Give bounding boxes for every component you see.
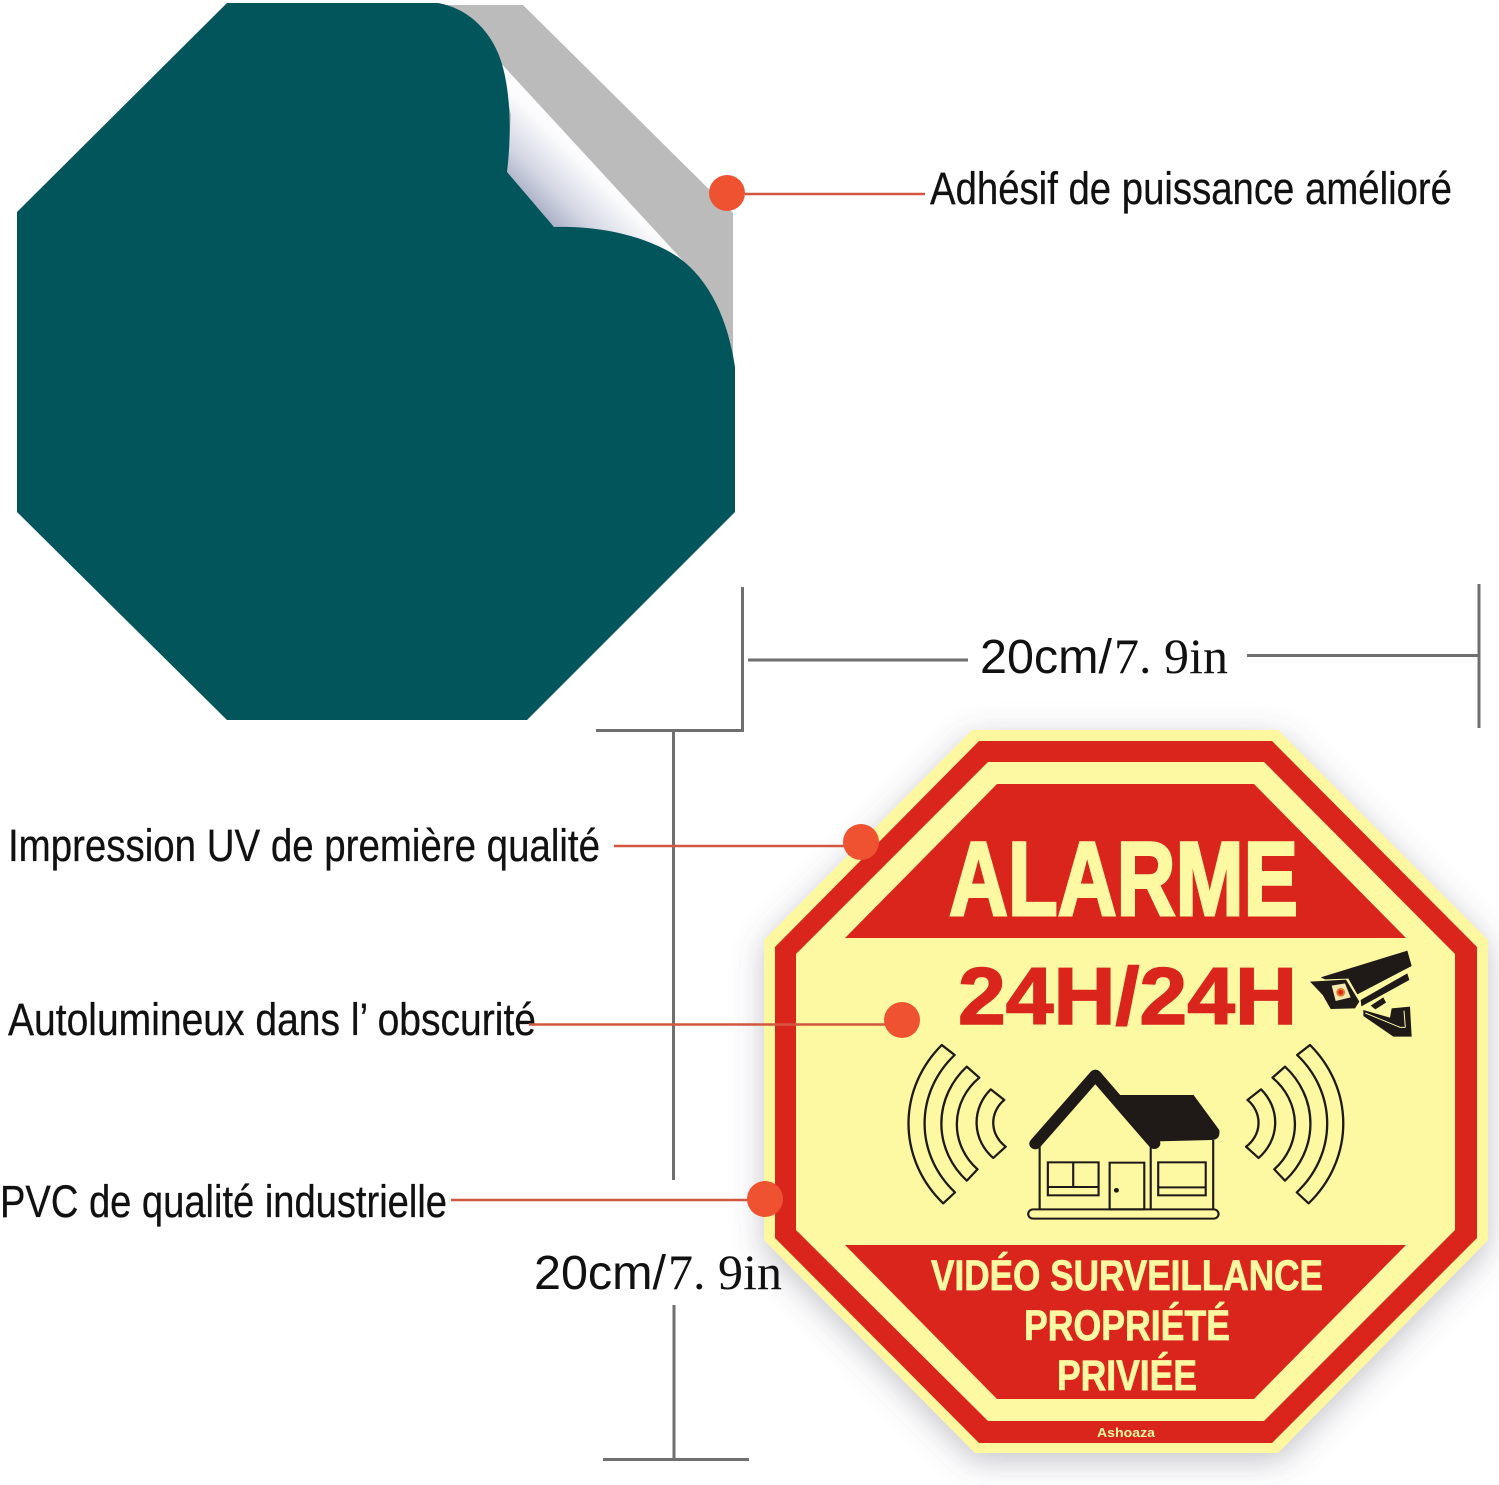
label: height dimension: 20cm/ xyxy=(534,1247,667,1300)
icon: left signal waves xyxy=(909,1045,1006,1203)
peeled corner (white curl) xyxy=(498,60,686,264)
icon: security camera xyxy=(1310,951,1412,1037)
label: width dimension xyxy=(980,628,1228,684)
label: height dimension: 7. 9in xyxy=(668,1244,782,1300)
callout: glow in the dark: Autolumineux dans l’ obscurité xyxy=(8,994,536,1045)
bottom red banner xyxy=(845,1245,1406,1399)
icon: house xyxy=(1028,1075,1219,1219)
inner yellow field xyxy=(796,762,1455,1421)
panel: sticker back with peeled corner xyxy=(17,3,735,720)
label: height dimension xyxy=(534,1244,782,1300)
top red banner xyxy=(845,784,1406,938)
label: width dimension: 7. 9in xyxy=(1114,628,1228,684)
callout: industrial PVC xyxy=(0,1176,783,1227)
text: VIDÉO SURVEILLANCE: VIDÉO SURVEILLANCE xyxy=(931,1252,1323,1300)
sign outer glow border xyxy=(764,730,1488,1453)
text: PROPRIÉTÉ: PROPRIÉTÉ xyxy=(1024,1302,1230,1350)
callout: enhanced adhesive xyxy=(709,163,1452,214)
panel: dimension lines xyxy=(596,584,1479,1460)
callout: glow in the dark xyxy=(8,994,920,1045)
adhesive backing (grey) xyxy=(440,5,733,370)
text: 24H/24H: 24H/24H xyxy=(958,952,1297,1042)
heading: ALARME: ALARME xyxy=(949,821,1298,938)
text: PRIVIÉE: PRIVIÉE xyxy=(1057,1352,1197,1400)
label: width dimension: 20cm/ xyxy=(980,631,1113,684)
callout: UV printing: Impression UV de première qualité xyxy=(8,820,600,871)
icon: house with signal waves xyxy=(909,1045,1343,1219)
text: brand Ashoaza: Ashoaza xyxy=(1097,1425,1156,1440)
panel: alarm sign front xyxy=(764,730,1488,1453)
callout: industrial PVC: PVC de qualité industrielle xyxy=(0,1176,447,1227)
icon: right signal waves xyxy=(1246,1045,1343,1203)
red border xyxy=(775,741,1477,1443)
teal octagon sticker back xyxy=(17,3,735,720)
